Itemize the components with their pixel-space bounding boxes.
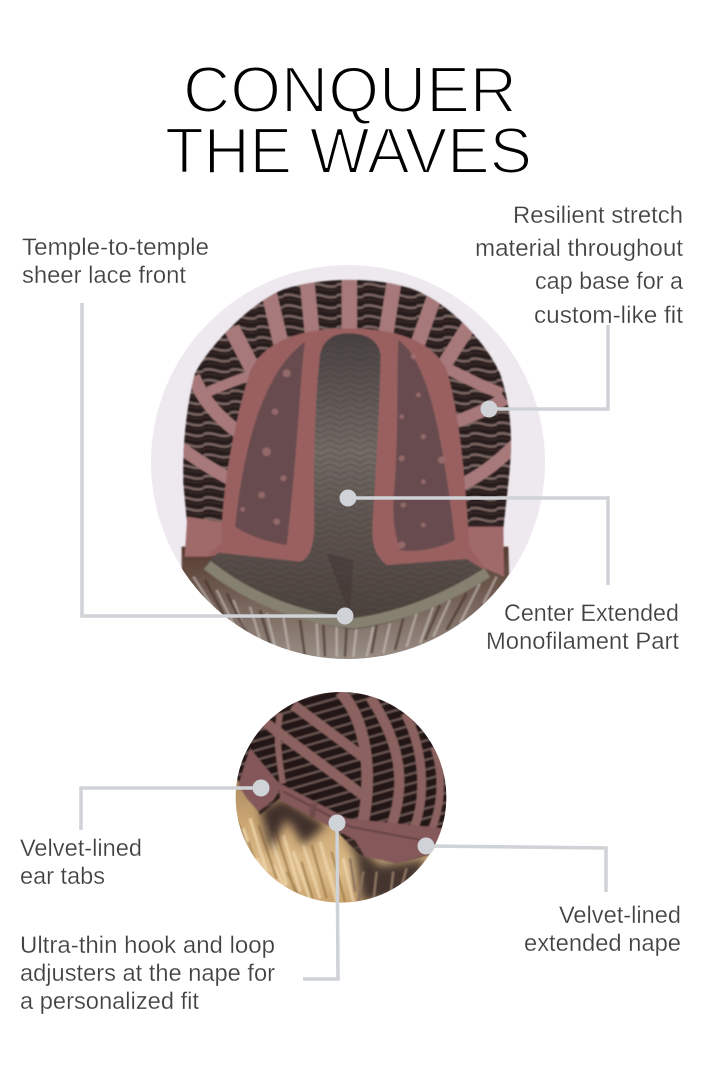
ribs	[265, 692, 440, 833]
wig cap photo illustration	[182, 270, 515, 660]
title: THE WAVES	[165, 114, 532, 187]
label: monofilament part	[486, 600, 679, 655]
mesh panel: left	[235, 342, 305, 545]
label: ear tabs: ear tabs	[20, 863, 105, 890]
background circle	[151, 265, 545, 659]
label: extended nape: extended nape	[524, 930, 681, 957]
label: adjusters: a personalized fit	[20, 988, 199, 1015]
label: lace front: sheer lace front	[22, 262, 186, 289]
label: monofilament part: Center Extended	[504, 600, 679, 627]
monofilament center part and lace	[207, 333, 487, 629]
nape band	[280, 783, 443, 863]
maroon U frame	[207, 328, 485, 568]
label: extended nape: Velvet-lined	[559, 902, 681, 929]
label: adjusters: adjusters at the nape for	[20, 960, 275, 987]
callout: stretch material	[480, 325, 608, 418]
stretch ribs	[182, 270, 515, 485]
title	[165, 53, 532, 187]
callout: adjusters	[303, 814, 346, 979]
callout: lace front	[82, 303, 354, 624]
label: adjusters	[20, 932, 275, 1015]
side flanks	[185, 517, 230, 557]
label: lace front: Temple-to-temple	[22, 234, 209, 261]
callout: ear tabs	[81, 780, 270, 830]
dark wefted hair area	[237, 692, 446, 862]
label: stretch material	[475, 202, 683, 329]
mesh panel: right	[393, 340, 455, 551]
label: ear tabs: Velvet-lined	[20, 835, 142, 862]
label: stretch material: material throughout	[475, 235, 683, 262]
panel: nape cap view	[236, 692, 446, 903]
lace edge strip	[207, 565, 487, 623]
label: adjusters: Ultra-thin hook and loop	[20, 932, 275, 959]
small adjuster tab	[309, 803, 317, 818]
hair below the cap	[182, 547, 512, 660]
panel: front cap view	[151, 265, 545, 660]
label: lace front	[22, 234, 209, 289]
label: stretch material: cap base for a	[535, 268, 683, 295]
dark wefted hair area	[183, 280, 511, 537]
mesh dots	[240, 354, 445, 549]
title: CONQUER	[183, 53, 517, 126]
label: stretch material: custom-like fit	[534, 302, 683, 329]
label: monofilament part: Monofilament Part	[486, 628, 679, 655]
label: extended nape	[524, 902, 681, 957]
callout: monofilament part	[340, 490, 608, 585]
blond hair	[236, 778, 430, 903]
label: stretch material: Resilient stretch	[513, 202, 683, 229]
callout: extended nape	[418, 838, 606, 892]
label: ear tabs	[20, 835, 142, 890]
ear tab	[238, 748, 282, 812]
